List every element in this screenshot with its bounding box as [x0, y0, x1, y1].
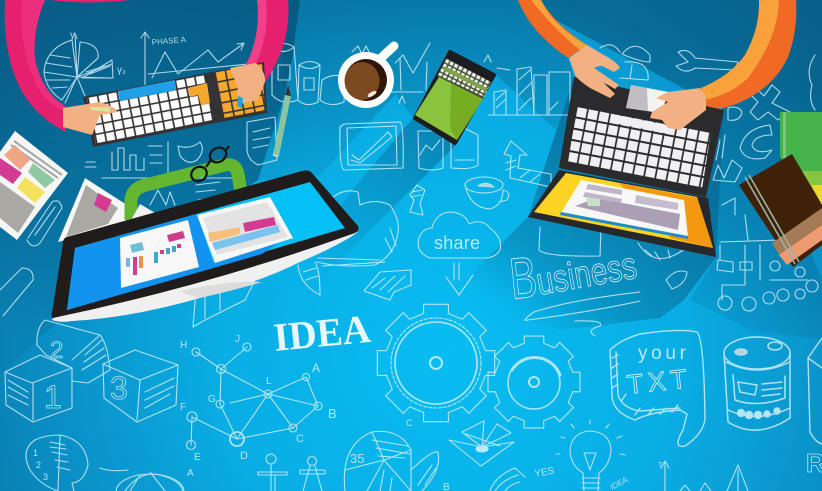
phone keypad [437, 58, 491, 99]
doodle: pie chart 35: 35 [350, 451, 364, 466]
doodle: tablet with check mark [340, 122, 403, 170]
doodle: arrows lower right: T [658, 462, 663, 469]
keyboard orange L key [188, 83, 210, 105]
doodle: right-edge pencil and letter R [806, 338, 822, 478]
blue sparkle on numpad [237, 96, 243, 108]
doodle: radial pie chart [44, 30, 126, 103]
text: TXT: TXT [625, 364, 688, 400]
doodle: yes swirl: YES [534, 466, 556, 480]
panel: brown notebook [739, 154, 822, 267]
doodle: yes swirl [490, 466, 556, 491]
laptop page [560, 180, 688, 239]
doodle: pie chart 35: C [406, 418, 413, 428]
long shadows [0, 0, 822, 375]
right hand on laptop [650, 88, 706, 130]
text: Business [507, 244, 640, 312]
doodle: numbered blocks: 2 [50, 337, 63, 364]
keyboard orange numpad [215, 64, 265, 118]
doodle: speech bubble lower left: 3 [43, 472, 48, 482]
doodle: atom [100, 468, 184, 491]
keyboard keys [87, 75, 212, 144]
doodle: light bulb [556, 420, 630, 491]
text: Business: usiness [533, 245, 640, 304]
tablet screen [67, 182, 345, 310]
panel: green book [780, 112, 822, 205]
phone green screen [415, 77, 483, 140]
keyboard body [83, 62, 267, 147]
doodle: small gear [488, 336, 580, 428]
doodle: network diagram: C [296, 433, 304, 445]
doodle: network diagram: J [235, 334, 240, 345]
doodle: network diagram: A [187, 468, 194, 479]
panel: newspaper behind tablet [58, 178, 130, 242]
orange arms [518, 0, 796, 110]
doodle: network diagram: D [240, 450, 248, 462]
doodle: arrows lower right [658, 461, 748, 491]
left hand on laptop [569, 45, 620, 98]
phone green stripe [443, 66, 487, 92]
doodle: speech bubble your TXT [610, 330, 705, 446]
laptop yellow screen [534, 173, 713, 248]
doodle: network diagram [180, 334, 337, 479]
doodle: speech bubble lower left: 2 [36, 460, 41, 470]
pink arm [5, 0, 288, 132]
panel: tablet [52, 170, 359, 322]
doodle: tin can [724, 337, 790, 430]
doodle: numbered blocks: 3 [110, 370, 128, 406]
laptop keys [568, 106, 711, 189]
doodle: speech bubble lower left: 1 [33, 448, 38, 458]
doodle: speech bubble lower left [26, 435, 88, 491]
doodle: network diagram: B [328, 406, 337, 421]
doodle: network diagram: G [208, 394, 216, 405]
doodle: wrench [676, 50, 738, 71]
text: share: share [434, 233, 480, 253]
tablet base fold [180, 282, 262, 298]
keyboard blue bar [118, 80, 176, 101]
icon: smartphone [415, 52, 494, 143]
doodle: hatched arrow [364, 270, 411, 300]
doodle: clipboard and bar chart [85, 117, 277, 205]
left thumbnail highlight [90, 107, 110, 112]
doodle: ribbon [193, 280, 255, 327]
doodle: bar chart sketch [484, 55, 570, 115]
doodle: network diagram: F [180, 402, 186, 413]
doodle: network diagram: H [180, 340, 187, 351]
text: Business: B [507, 244, 540, 312]
doodle: underlines below Business [525, 227, 687, 336]
doodle: large gear [377, 304, 495, 422]
doodle: phase line chart [141, 32, 268, 93]
panel: left user with keyboard [5, 0, 288, 147]
doodle: share cloud [418, 212, 501, 295]
doodle: network diagram: E [194, 452, 201, 463]
doodle: network diagram: A [312, 361, 320, 375]
doodle: paper clips [0, 201, 62, 316]
laptop screen frame [528, 170, 716, 257]
panel: newspaper left [0, 131, 68, 240]
doodle: numbered blocks [5, 320, 178, 422]
doodle: radial pie chart: γ₁ [70, 30, 79, 41]
doodle: cans [272, 44, 345, 105]
doodle: phase line chart: PHASE A [151, 35, 187, 47]
icon: coffee mug [338, 46, 394, 108]
doodle: recycling icons right [713, 55, 815, 182]
doodle: pie chart 35 [344, 418, 450, 491]
doodle: open box [449, 421, 514, 466]
doodle: coffee cup [465, 177, 509, 209]
right hand [230, 63, 265, 104]
doodle: up arrow [504, 141, 551, 187]
text: IDEA: IDEA [272, 306, 373, 360]
text: your: your [638, 343, 687, 364]
report page [197, 197, 293, 263]
tablet frame [52, 170, 359, 318]
icon: pencil [273, 85, 291, 157]
panel: right user with laptop [518, 0, 796, 257]
laptop base [559, 77, 724, 197]
doodle: cloud with hatch [298, 191, 398, 295]
doodle: small hatched arrow [410, 185, 425, 215]
doodle: flow chart [717, 198, 818, 311]
doodle: line chart by mug [352, 43, 430, 103]
laptop spacebar [610, 114, 671, 134]
icon: green cup handle [130, 165, 241, 222]
laptop trackpad [626, 85, 669, 113]
dashboard page [120, 220, 199, 288]
icon: glasses [189, 145, 229, 184]
doodle: person icons [258, 454, 325, 491]
doodle: network diagram: L [266, 376, 272, 387]
doodle: radial pie chart: γ₂ [117, 65, 126, 76]
doodle: alarm clock [600, 45, 650, 80]
left hand [63, 102, 117, 135]
tablet base [52, 224, 358, 322]
doodle: numbered blocks: 1 [44, 379, 62, 415]
doodle: phones [418, 127, 478, 170]
